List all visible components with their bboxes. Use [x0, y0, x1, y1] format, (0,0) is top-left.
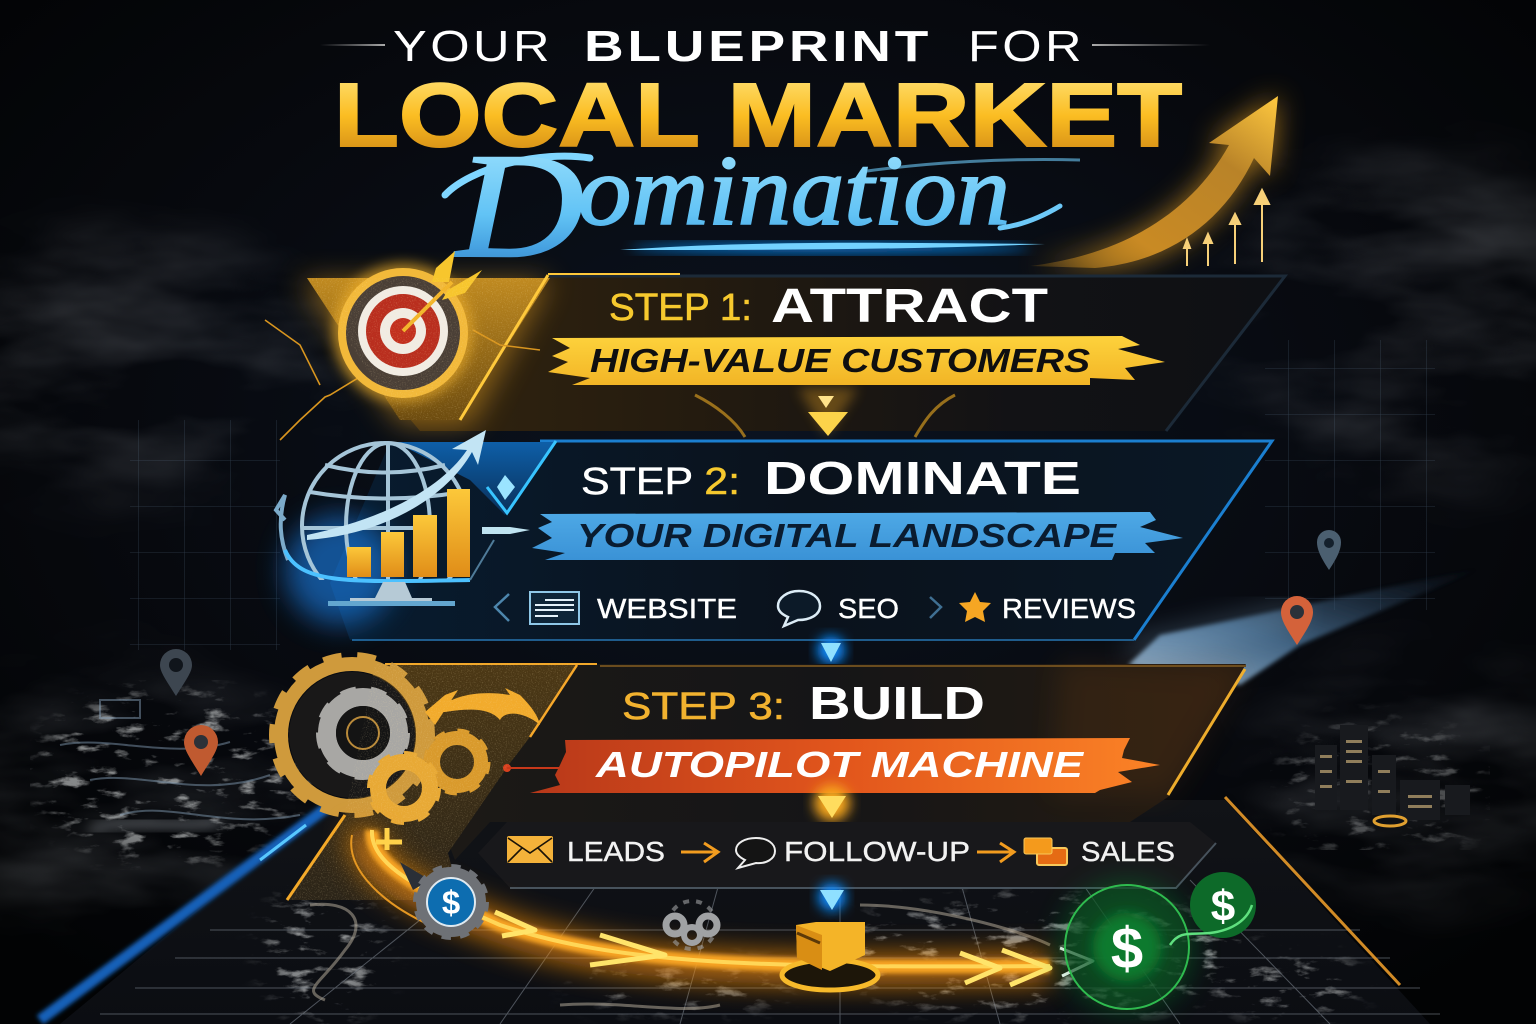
step 2 heading: STEP 2:: [581, 461, 740, 503]
label: leads: LEADS: [567, 836, 665, 867]
speckle texture on tabs: [280, 270, 580, 910]
panel: step 3 build: [276, 659, 1246, 900]
map sketch left: [30, 680, 320, 870]
city skyline right: [1270, 700, 1490, 850]
label: sales: SALES: [1081, 836, 1175, 867]
title: BLUEPRINT: [584, 22, 932, 71]
yellow brush banner: [548, 336, 1165, 385]
blue brush banner: [532, 512, 1183, 560]
connector gem blue lower: [818, 883, 846, 911]
panel: step 1 attract: [265, 251, 1285, 440]
title: FOR: [968, 22, 1085, 71]
step 3 heading: STEP 3:: [622, 686, 785, 728]
label: follow-up: FOLLOW-UP: [784, 836, 970, 867]
flow plus mark: [376, 828, 402, 850]
smoke haze: [0, 148, 1536, 910]
icon: dollar gear: $: [442, 884, 460, 921]
glowing flow path: [351, 828, 1093, 985]
swoosh arrow: [425, 688, 540, 725]
step 3 heading: [622, 677, 985, 729]
map floor: [60, 800, 1440, 1024]
icon: website document: [530, 592, 579, 624]
yellow brush banner: HIGH-VALUE CUSTOMERS: [590, 342, 1090, 379]
icon: sales cards: [1024, 838, 1067, 865]
step 1 heading: STEP 1:: [609, 287, 752, 329]
big growth arrow: [1030, 96, 1278, 268]
floor edge blue line left: [40, 803, 333, 1020]
down arrow marker: [695, 388, 955, 437]
label: seo: SEO: [838, 593, 899, 624]
feature row: website seo reviews: [495, 591, 1136, 626]
icon: star: [959, 592, 991, 622]
blue brush banner: YOUR DIGITAL LANDSCAPE: [577, 517, 1117, 554]
arrow: leads to follow-up: [681, 843, 718, 862]
title line: domination script: omination: [578, 135, 1010, 246]
lightning cracks: [265, 320, 540, 440]
icon: small grey gears: [666, 901, 717, 949]
title: YOUR: [393, 22, 553, 71]
icon: green dollar circles: $: [1111, 916, 1143, 981]
label: website: WEBSITE: [597, 593, 737, 624]
title line: domination script: D: [454, 123, 584, 289]
process row panel: [478, 822, 1216, 888]
chevrons on flow: [495, 912, 1093, 985]
gold triangle tab: [307, 278, 550, 420]
label: reviews: REVIEWS: [1002, 593, 1136, 624]
title: [320, 22, 1210, 71]
map pins right: [1281, 530, 1341, 645]
background grids: [130, 340, 1435, 650]
gold textured tab: [287, 664, 577, 900]
step 1 heading: ATTRACT: [771, 280, 1048, 333]
orange brush banner: AUTOPILOT MACHINE: [595, 744, 1084, 785]
step 1 heading: [609, 280, 1048, 333]
floor edge gold line right: [1225, 797, 1400, 985]
icon: target with arrow: [333, 251, 482, 403]
icon: gold box: [782, 922, 878, 990]
icon: chat bubble: [736, 838, 775, 868]
right light streak: [1128, 568, 1482, 685]
title line: domination script: [445, 123, 1080, 289]
panel: step 2 dominate: [276, 430, 1272, 640]
step 3 heading: BUILD: [809, 677, 985, 729]
icon: dollar gear: [400, 862, 485, 936]
connector gem blue upper: [817, 636, 845, 664]
step 2 heading: [581, 452, 1081, 504]
icon: left chevron: [495, 594, 509, 621]
icon: envelope: [507, 836, 553, 863]
icon: green dollar circles: [1061, 872, 1256, 1013]
orange brush banner: [503, 738, 1160, 793]
arrow: follow-up to sales: [977, 843, 1014, 862]
icon: gears: [276, 659, 540, 820]
map pins left: [160, 649, 218, 776]
icon: green dollar circles: $: [1211, 882, 1235, 931]
connector gem gold: [814, 785, 850, 821]
blue triangle tab: [395, 442, 556, 515]
icon: globe chart monitor: [276, 430, 494, 625]
icon: speech bubble: [778, 591, 820, 626]
step 2 heading: DOMINATE: [764, 452, 1081, 504]
title line: local market: LOCAL MARKET: [334, 66, 1182, 166]
icon: right chevron: [930, 597, 941, 618]
